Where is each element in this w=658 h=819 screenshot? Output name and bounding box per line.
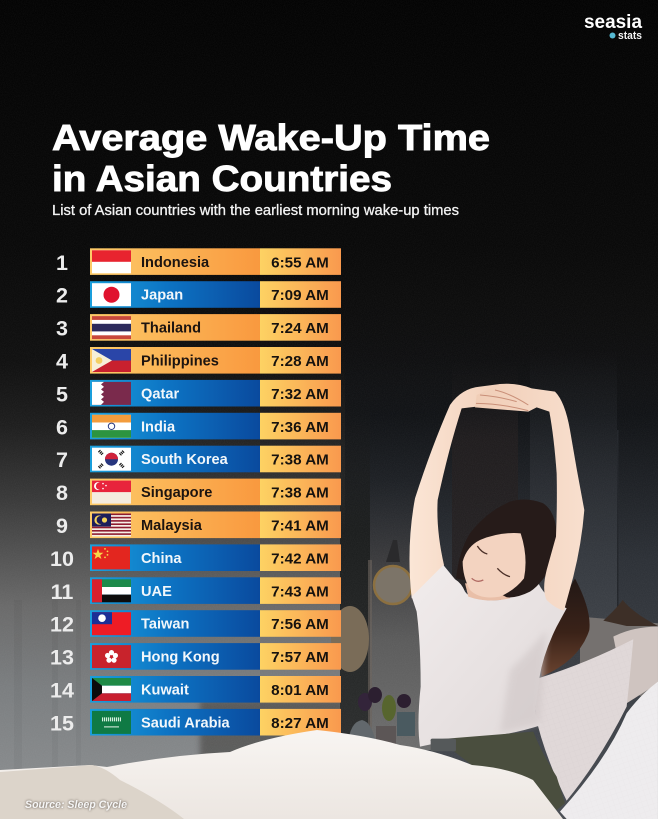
row 8: Singapore — [56, 479, 341, 505]
title: in Asian Countries — [52, 158, 392, 199]
shirt shadows — [500, 630, 547, 733]
row 6: India: 6 — [56, 415, 68, 439]
row 14: Kuwait: Kuwait — [141, 682, 189, 698]
row 11: UAE: 11 — [51, 580, 73, 604]
row 13: Hong Kong: Hong Kong — [141, 650, 220, 666]
row 7: South Korea — [56, 446, 341, 472]
pillow behind the woman — [535, 639, 633, 801]
row 9: Malaysia: 7:41 AM — [271, 518, 329, 534]
front pillow — [560, 682, 658, 819]
row 5: Qatar: Qatar — [141, 386, 179, 402]
ranking table — [50, 248, 341, 736]
row 1: Indonesia: 6:55 AM — [271, 254, 329, 271]
row 12: Taiwan: Taiwan — [141, 617, 189, 633]
row 4: Philippines: Philippines — [141, 354, 219, 370]
row 15: Saudi Arabia: 15 — [50, 711, 74, 735]
source note: Source: Sleep Cycle — [25, 799, 127, 811]
row 3: Thailand: Thailand — [141, 321, 201, 337]
row 8: Singapore: Singapore — [141, 485, 212, 501]
row 2: Japan: 2 — [56, 284, 68, 308]
row 2: Japan — [56, 281, 341, 308]
logo: seasia stats — [584, 11, 642, 42]
ponytail — [540, 578, 590, 677]
bedroom decor: lamp, wicker ball, vase and flowers — [331, 540, 415, 746]
row 1: Indonesia — [56, 248, 341, 275]
subtitle: List of Asian countries with the earliest morning wake-up times — [52, 203, 459, 219]
row 5: Qatar — [56, 380, 341, 406]
right arm — [475, 384, 584, 611]
row 15: Saudi Arabia — [50, 709, 341, 736]
row 3: Thailand: 7:24 AM — [271, 320, 329, 337]
row 2: Japan: Japan — [141, 288, 183, 304]
belt buckle — [431, 739, 456, 751]
headboard and cushions — [580, 600, 658, 703]
neck — [465, 583, 513, 600]
row 2: Japan: 7:09 AM — [271, 287, 329, 304]
row 14: Kuwait: 14 — [50, 678, 74, 702]
title — [52, 117, 490, 199]
row 1: Indonesia: Indonesia — [141, 255, 210, 271]
row 1: Indonesia: 1 — [56, 251, 68, 275]
clasped hands — [476, 390, 528, 411]
row 11: UAE — [51, 577, 341, 604]
row 7: South Korea: South Korea — [141, 452, 229, 468]
trousers — [430, 732, 565, 810]
row 5: Qatar: 5 — [56, 382, 68, 406]
title: Average Wake-Up Time — [52, 117, 490, 158]
row 5: Qatar: 7:32 AM — [271, 386, 329, 403]
hair — [456, 500, 557, 597]
row 14: Kuwait — [50, 676, 341, 703]
blanket — [0, 730, 563, 819]
row 11: UAE: UAE — [141, 584, 172, 600]
row 10: China: 7:42 AM — [271, 550, 329, 567]
row 15: Saudi Arabia: Saudi Arabia — [141, 715, 231, 731]
face — [463, 533, 526, 597]
logo: seasia stats: seasia — [584, 11, 642, 33]
row 12: Taiwan: 12 — [50, 613, 74, 637]
row 13: Hong Kong: 13 — [50, 646, 74, 670]
row 6: India — [56, 413, 341, 439]
row 6: India: India — [141, 419, 176, 435]
row 3: Thailand: 3 — [56, 317, 68, 341]
left arm — [409, 384, 528, 598]
row 10: China — [50, 544, 341, 571]
row 12: Taiwan: 7:56 AM — [271, 616, 329, 633]
woman stretching — [409, 384, 590, 810]
row 13: Hong Kong — [50, 643, 341, 670]
row 13: Hong Kong: 7:57 AM — [271, 649, 329, 666]
row 9: Malaysia: Malaysia — [141, 518, 203, 534]
logo: seasia stats: stats — [618, 30, 642, 42]
row 4: Philippines: 4 — [56, 350, 68, 374]
row 10: China: 10 — [50, 547, 74, 571]
row 14: Kuwait: 8:01 AM — [271, 682, 329, 699]
row 12: Taiwan — [50, 610, 341, 637]
closed eyes and mouth — [472, 546, 510, 581]
row 6: India: 7:36 AM — [271, 419, 329, 436]
row 3: Thailand — [56, 314, 341, 341]
row 8: Singapore: 7:38 AM — [271, 485, 329, 502]
row 7: South Korea: 7:38 AM — [271, 452, 329, 469]
row 15: Saudi Arabia: 8:27 AM — [271, 715, 329, 732]
row 9: Malaysia — [56, 512, 341, 538]
row 8: Singapore: 8 — [56, 481, 68, 505]
row 4: Philippines: 7:28 AM — [271, 353, 329, 370]
t-shirt — [412, 565, 567, 747]
row 4: Philippines — [56, 347, 341, 374]
row 7: South Korea: 7 — [56, 448, 68, 472]
row 11: UAE: 7:43 AM — [271, 583, 329, 600]
row 10: China: China — [141, 551, 182, 567]
row 9: Malaysia: 9 — [56, 514, 68, 538]
